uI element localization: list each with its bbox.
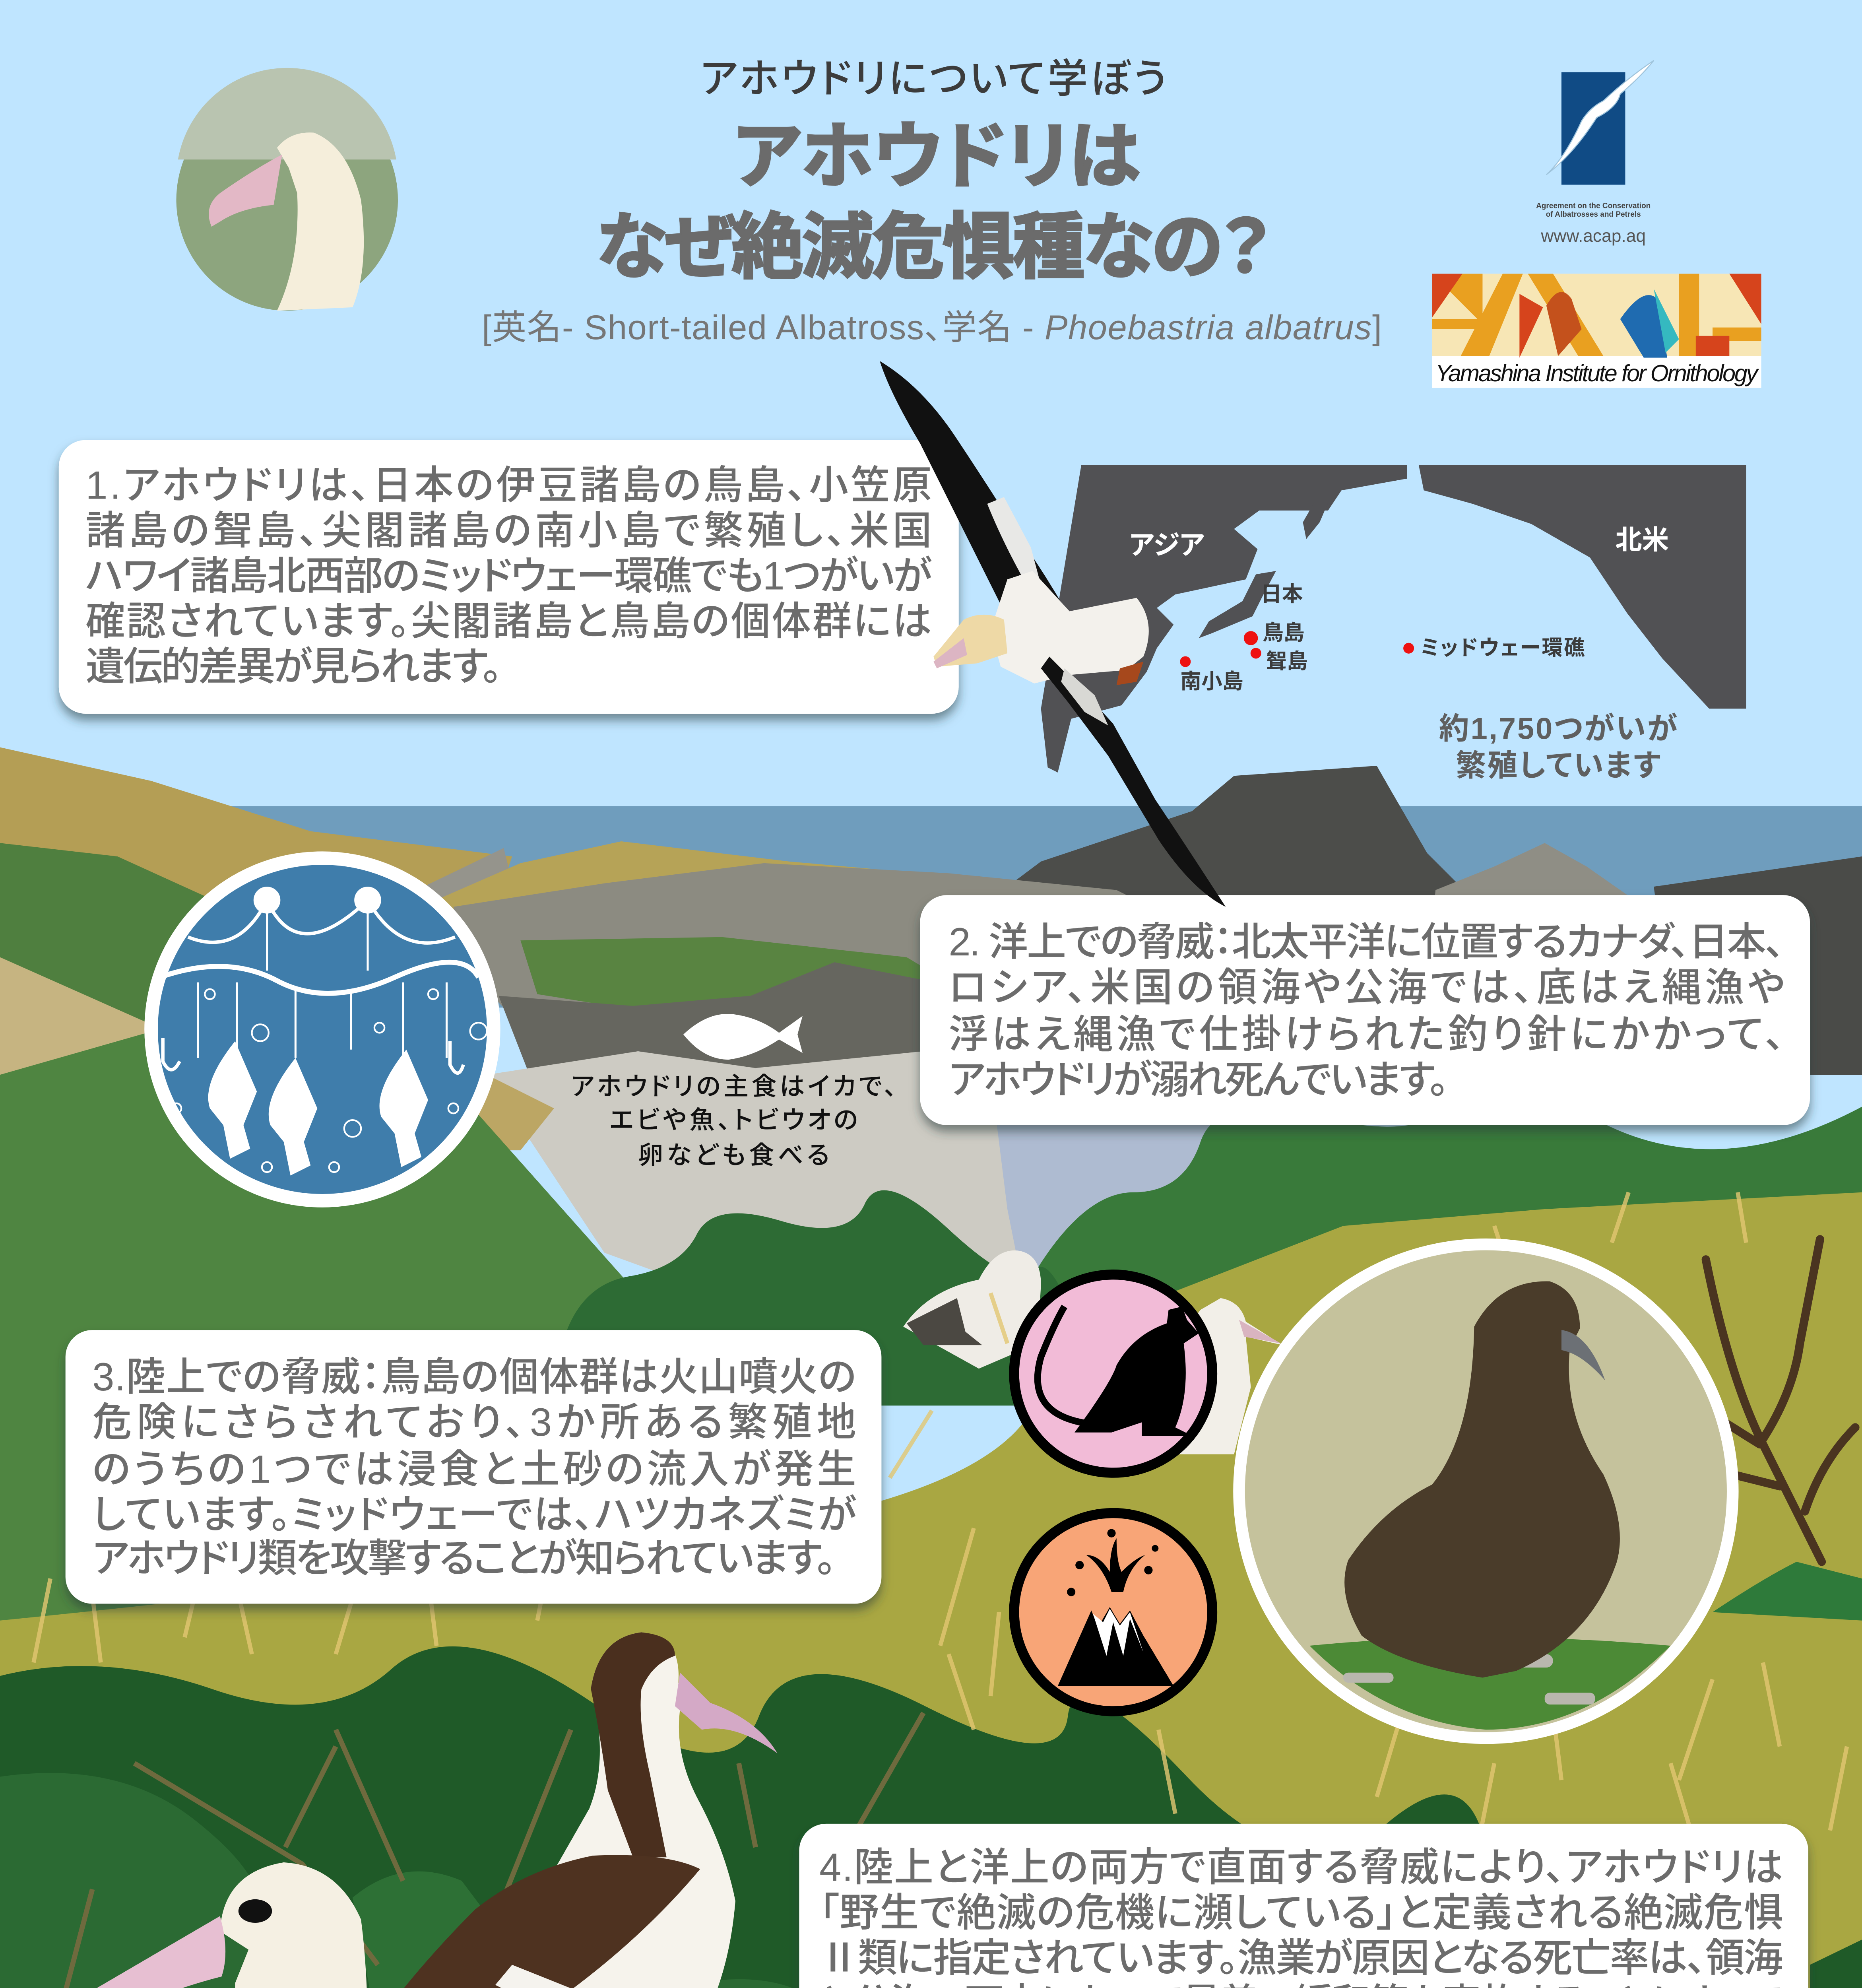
panel 3: threats on land: アホウドリ類を攻撃することが知られています。 <box>92 1536 836 1580</box>
panel 2: threats at sea: アホウドリが溺れ死んでいます。 <box>948 1058 1449 1102</box>
panel 1: distribution text: 遺伝的差異が見られます。 <box>85 645 502 689</box>
panel 1: distribution text <box>59 440 959 714</box>
red location dots <box>1180 631 1414 667</box>
ACAP logo: of Albatrosses and Petrels <box>1546 210 1641 219</box>
diet caption: 卵なども食べる <box>638 1142 829 1169</box>
labels: islands: 鳥島 <box>1263 621 1305 645</box>
map <box>1041 465 1746 782</box>
land: Japan <box>1199 571 1276 638</box>
labels: islands <box>1180 582 1585 693</box>
diet caption: アホウドリの主食はイカで、 <box>571 1073 896 1101</box>
label: North America: 北米 <box>1615 525 1669 555</box>
labels: islands: 日本 <box>1261 582 1303 606</box>
panel 1: distribution text: 1.アホウドリは、日本の伊豆諸島の鳥島、小笠原 <box>85 463 932 507</box>
title block <box>482 56 1382 347</box>
landscape: mountains and hills <box>0 747 1862 1988</box>
ground and moss <box>1309 1637 1670 1730</box>
main title: なぜ絶滅危惧種なの？ <box>596 207 1271 287</box>
panel 4: outlook text: 4.陸上と洋上の両方で直面する脅威により、アホウドリは <box>819 1845 1783 1889</box>
ACAP logo: Agreement on the Conservation <box>1536 202 1651 210</box>
background: sea <box>0 806 1862 1008</box>
panel 3: threats on land: 危険にさらされており、3か所ある繁殖地 <box>92 1400 856 1444</box>
panel 4: outlook text <box>799 1824 1808 1988</box>
chick illustration <box>1239 1244 1733 1738</box>
floats <box>254 887 381 914</box>
label: Asia: アジア <box>1129 530 1204 560</box>
land: North America <box>1419 465 1746 709</box>
adult seated albatross <box>66 1862 747 1988</box>
land: Kamchatka <box>1303 499 1330 539</box>
chick body <box>1344 1281 1620 1677</box>
main title <box>596 116 1271 287</box>
flying albatross <box>880 361 1226 907</box>
ACAP logo: www.acap.aq <box>1540 226 1646 246</box>
dark green bush band <box>0 1646 1862 1988</box>
icon: mouse <box>1014 1275 1212 1473</box>
panel 3: threats on land: のうちの1つでは浸食と土砂の流入が発生 <box>92 1447 856 1491</box>
icon: volcano <box>1014 1513 1212 1711</box>
right green bush <box>1713 1562 1862 1621</box>
portrait photo <box>176 68 398 311</box>
adult standing albatross <box>363 1632 778 1988</box>
background birds <box>903 1250 1283 1454</box>
population note: 約1,750つがいが <box>1439 712 1677 746</box>
labels: islands: ミッドウェー環礁 <box>1420 636 1585 660</box>
Yamashina Institute logo: Yamashina Institute for Ornithology <box>1435 360 1759 386</box>
panel 4: outlook text: Ⅱ類に指定されています。漁業が原因となる死亡率は、領海 <box>819 1936 1783 1980</box>
labels: islands: 南小島 <box>1180 670 1243 693</box>
population note: 繁殖しています <box>1456 749 1660 782</box>
panel 1: distribution text: ハワイ諸島北西部のミッドウェー環礁でも1つがいが <box>85 554 932 598</box>
panel 3: threats on land: 3.陸上での脅威：鳥島の個体群は火山噴火の <box>92 1355 856 1399</box>
ACAP logo <box>1536 60 1654 246</box>
diet caption <box>571 1073 896 1169</box>
panel 3: threats on land <box>66 1330 881 1604</box>
panel 3: threats on land: しています。ミッドウェーでは、ハツカネズミが <box>92 1493 856 1537</box>
grass blades <box>33 1192 1847 1847</box>
fish icon <box>683 1014 803 1060</box>
diet caption: エビや魚、トビウオの <box>609 1106 858 1134</box>
land: Asia <box>1041 465 1407 773</box>
panel 4: outlook text: 「野生で絶滅の危機に瀕している」と定義される絶滅危惧 <box>819 1891 1783 1935</box>
net illustration: longline fishing <box>151 858 494 1206</box>
panel 1: distribution text: 確認されています。尖閣諸島と鳥島の個体群には <box>85 600 932 644</box>
panel 1: distribution text: 諸島の聟島、尖閣諸島の南小島で繁殖し、米国 <box>85 509 932 553</box>
panel 2: threats at sea: 浮はえ縄漁で仕掛けられた釣り針にかかって、 <box>948 1013 1785 1057</box>
fish on hooks <box>208 1041 428 1176</box>
main title: アホウドリは <box>734 116 1140 197</box>
panel 2: threats at sea: 2. 洋上での脅威：北太平洋に位置するカナダ、日本、 <box>948 920 1785 964</box>
panel 2: threats at sea <box>920 895 1810 1125</box>
species names: [英名- Short-tailed Albatross、学名 - Phoebastria albatrus] <box>482 309 1382 347</box>
panel 2: threats at sea: ロシア、米国の領海や公海では、底はえ縄漁や <box>948 965 1785 1010</box>
dry tree <box>1692 1239 1855 1562</box>
population note <box>1439 712 1677 782</box>
labels: islands: 聟島 <box>1266 650 1308 673</box>
subtitle top: アホウドリについて学ぼう <box>700 56 1167 101</box>
Yamashina Institute logo <box>1432 274 1761 388</box>
